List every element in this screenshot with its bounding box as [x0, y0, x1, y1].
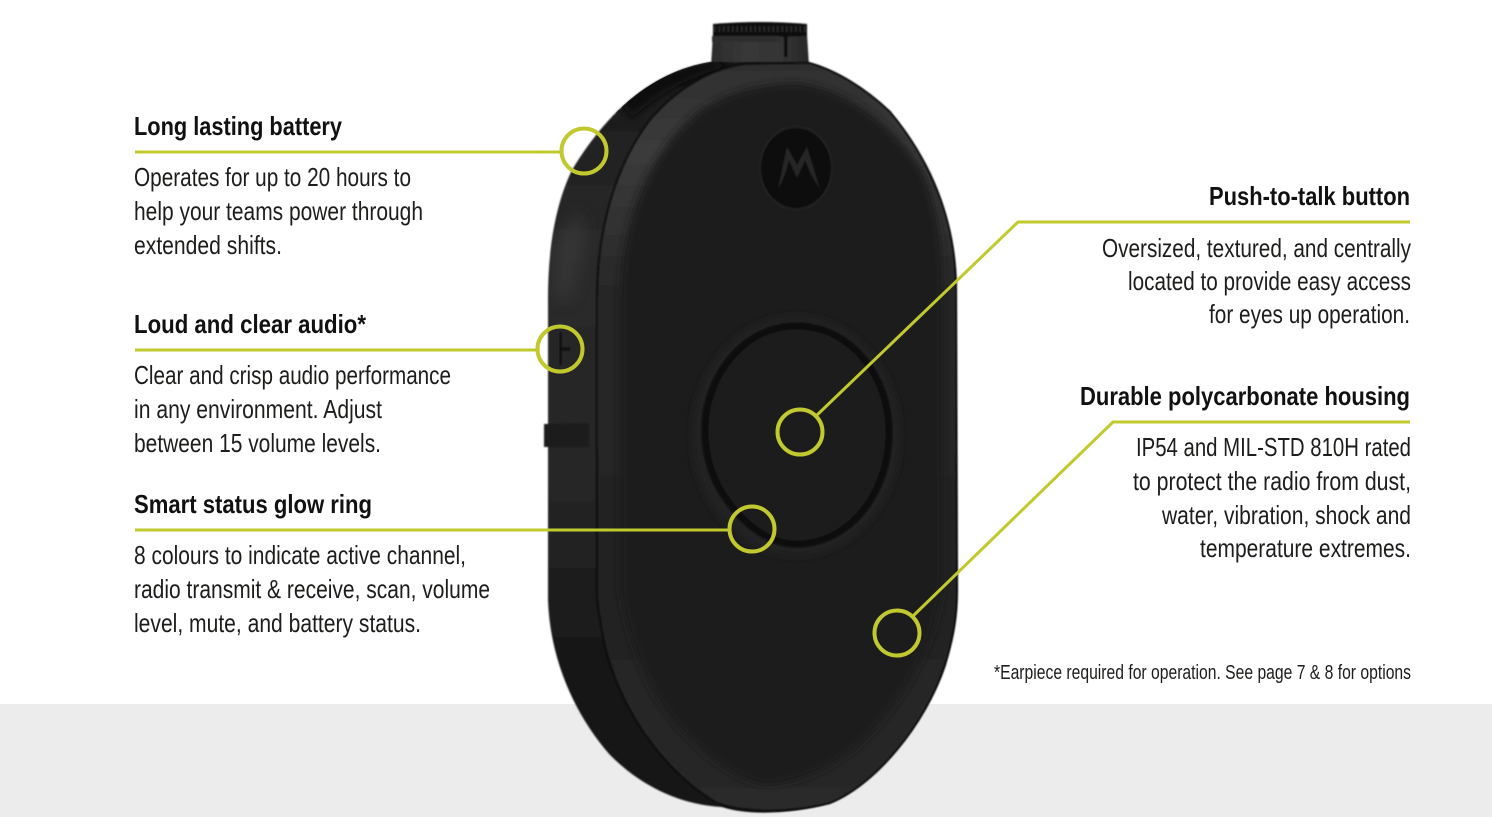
body text	[1102, 233, 1411, 329]
leader line and marker	[135, 326, 582, 372]
callout: long lasting battery	[134, 111, 606, 260]
heading: long lasting battery: Long lasting battery	[134, 111, 342, 141]
body text	[1133, 432, 1411, 563]
device: radio	[544, 22, 957, 813]
push-to-talk ring	[692, 316, 900, 556]
heading: smart status glow ring: Smart status glow ring	[134, 489, 372, 519]
body text: help your teams power through	[134, 196, 423, 226]
callout: loud and clear audio	[134, 309, 582, 458]
body text: extended shifts.	[134, 230, 282, 260]
body text: Operates for up to 20 hours to	[134, 162, 411, 192]
body text	[134, 360, 451, 458]
body text	[134, 162, 423, 260]
body text: in any environment. Adjust	[134, 394, 383, 424]
leader line and marker	[135, 128, 606, 174]
heading: loud and clear audio: Loud and clear audio*	[134, 309, 367, 339]
body text: Oversized, textured, and centrally	[1102, 233, 1411, 263]
body text: located to provide easy access	[1128, 266, 1411, 296]
device front face panel	[620, 83, 943, 785]
logo badge	[759, 126, 833, 210]
callout: smart status glow ring	[134, 489, 774, 638]
leader line and marker	[874, 422, 1410, 656]
body text: level, mute, and battery status.	[134, 608, 421, 638]
body text: Clear and crisp audio performance	[134, 360, 451, 390]
device body	[548, 62, 957, 813]
body text: temperature extremes.	[1200, 533, 1411, 563]
device front face rim	[597, 63, 957, 810]
grey floor band	[0, 704, 1492, 817]
audio jack mark	[560, 332, 570, 365]
body text: to protect the radio from dust,	[1133, 466, 1411, 496]
heading: durable polycarbonate housing: Durable polycarbonate housing	[1080, 381, 1410, 411]
device side shading	[556, 60, 730, 300]
body text: IP54 and MIL-STD 810H rated	[1136, 432, 1411, 462]
leader line and marker	[135, 506, 774, 552]
body text	[134, 540, 490, 638]
device knob	[711, 22, 809, 66]
volume button	[544, 423, 589, 447]
callout: push-to-talk button	[778, 181, 1411, 454]
body text: radio transmit & receive, scan, volume	[134, 574, 490, 604]
callout: durable polycarbonate housing	[874, 381, 1411, 656]
heading: push-to-talk button: Push-to-talk button	[1209, 181, 1410, 211]
body text: 8 colours to indicate active channel,	[134, 540, 466, 570]
leader line and marker	[778, 222, 1410, 454]
body text: between 15 volume levels.	[134, 428, 381, 458]
body text: for eyes up operation.	[1209, 299, 1410, 329]
body text: water, vibration, shock and	[1161, 500, 1411, 530]
